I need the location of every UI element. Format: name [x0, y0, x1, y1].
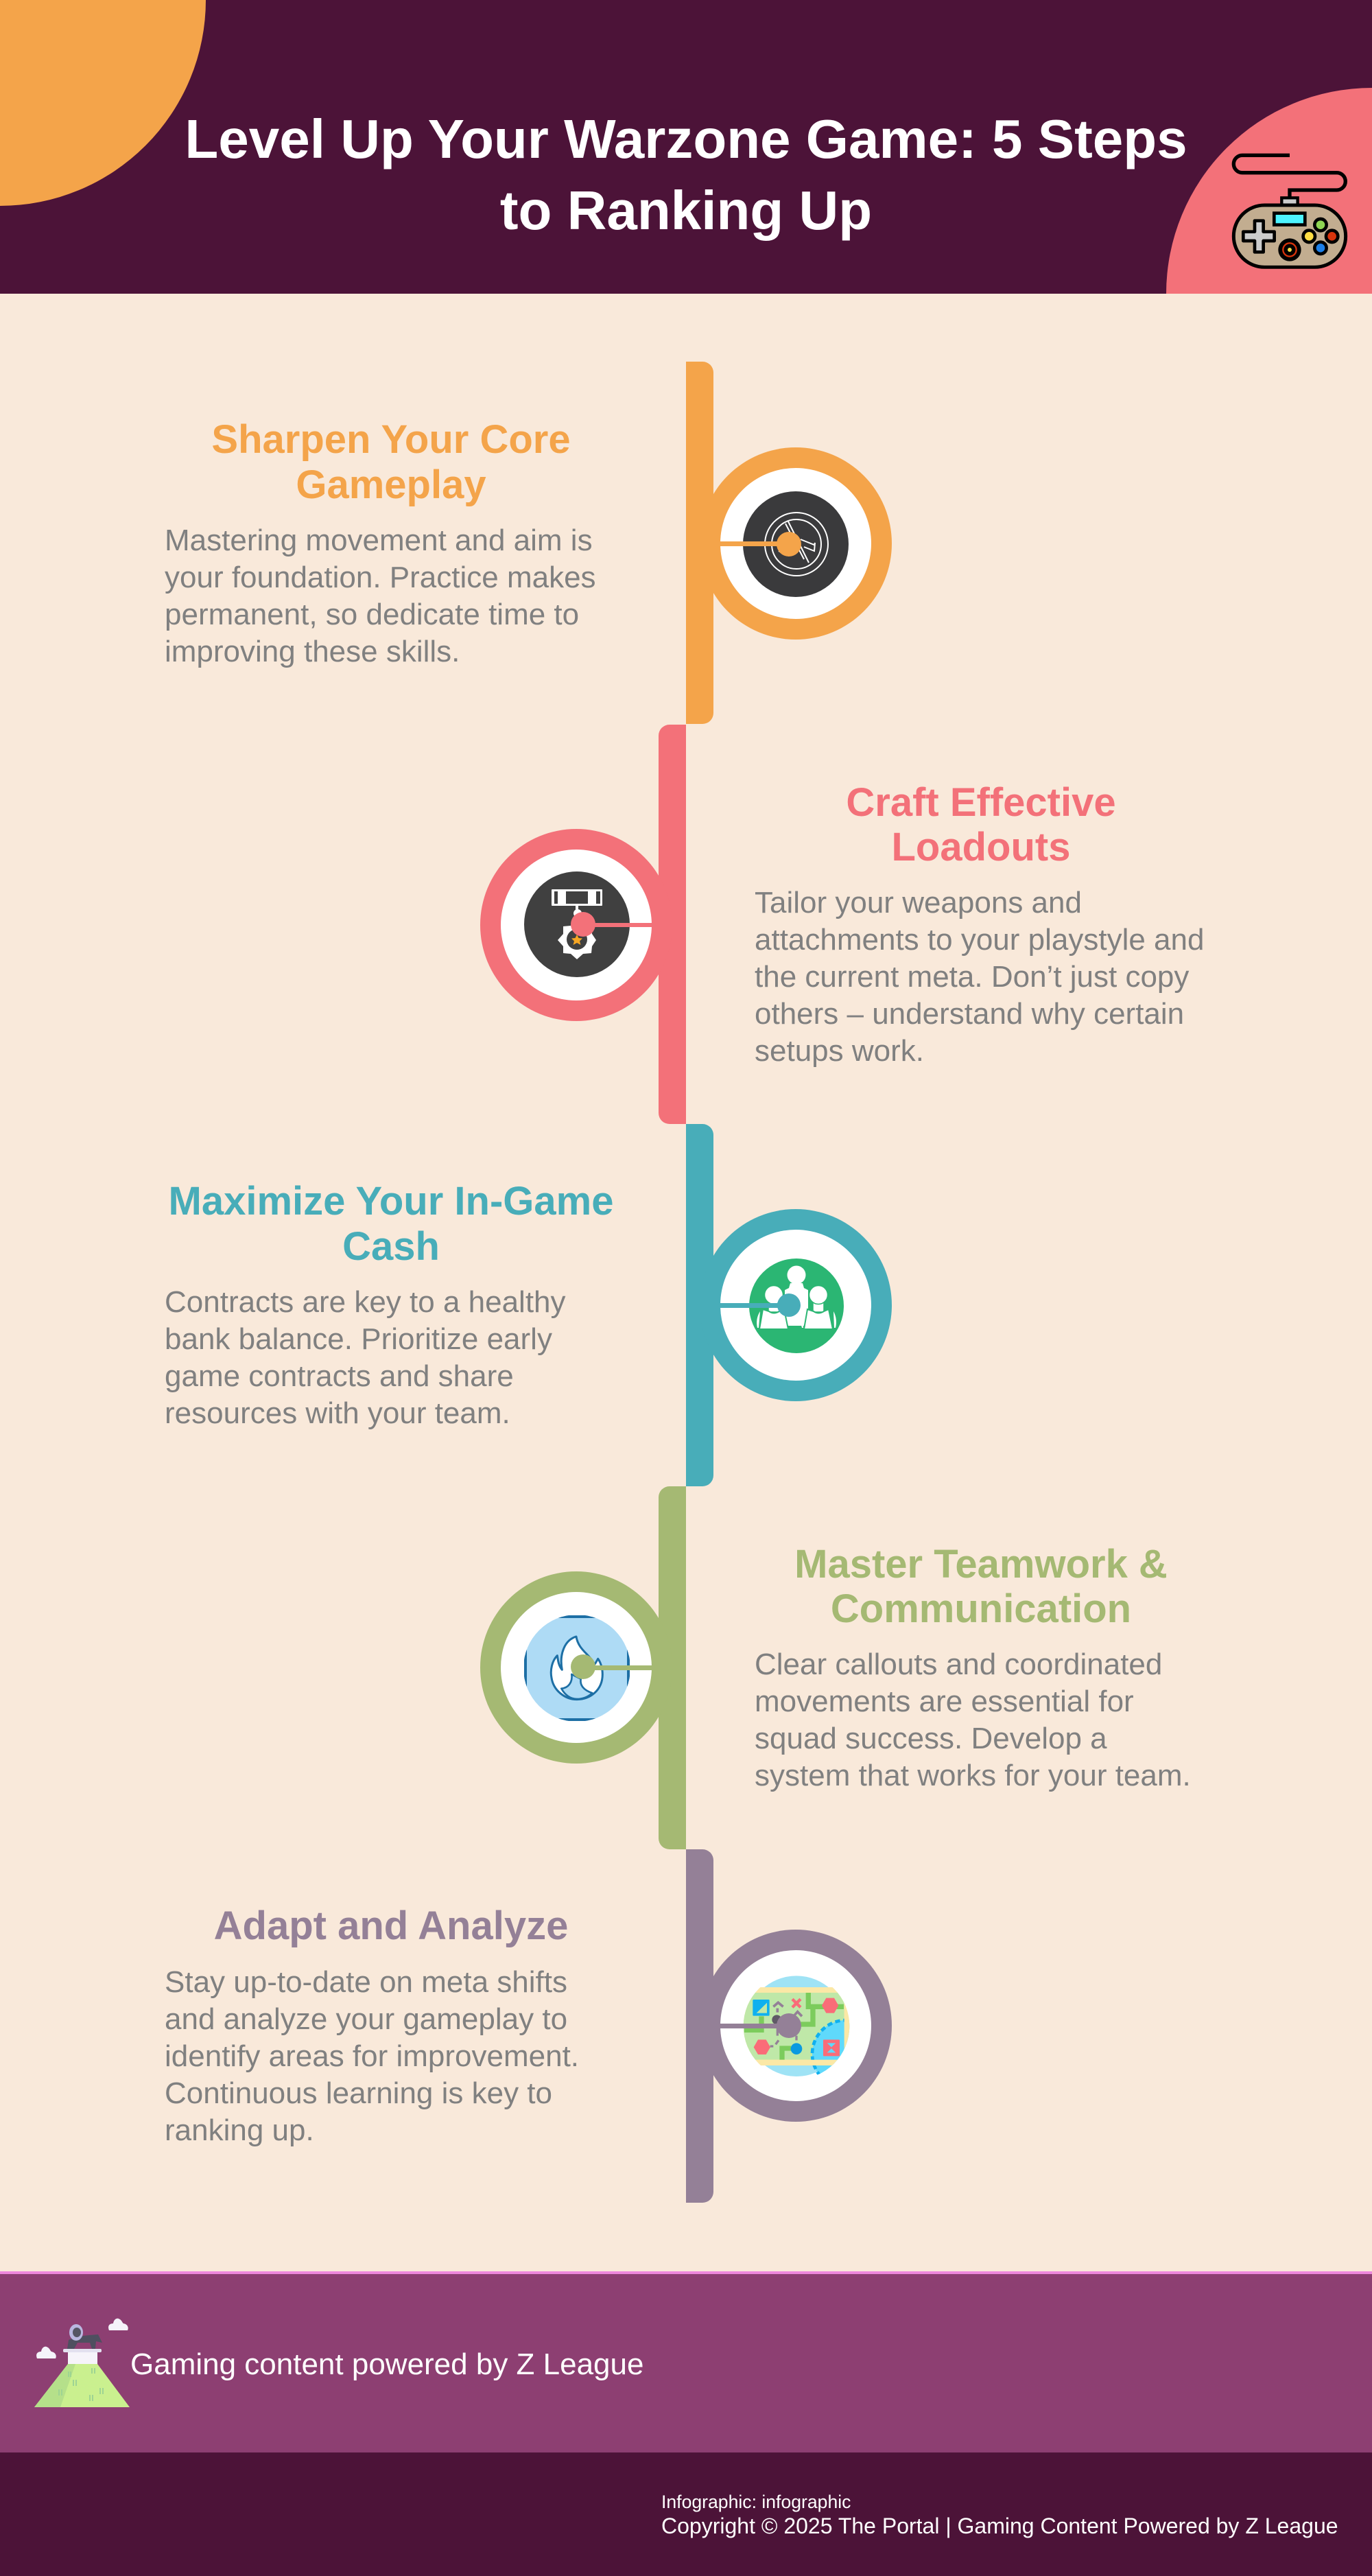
step 4 bar	[659, 1486, 686, 1849]
footer	[0, 2452, 1372, 2576]
step 1 heading: Sharpen Your Core	[211, 417, 571, 462]
step 1 heading	[211, 417, 571, 507]
step 1 heading: Gameplay	[296, 462, 486, 507]
icon: team	[749, 1258, 844, 1353]
step 2 connector	[571, 912, 652, 937]
decorative orange circle	[0, 0, 206, 206]
step 5 panel	[165, 1849, 892, 2203]
step 3 text: bank balance. Prioritize early	[165, 1322, 552, 1356]
step 1 panel	[165, 362, 892, 724]
step 3 heading: Cash	[342, 1224, 440, 1269]
step 3 text: game contracts and share	[165, 1359, 514, 1393]
step 2 heading	[846, 780, 1116, 869]
step 4 text: squad success. Develop a	[755, 1722, 1107, 1755]
step 2 text: attachments to your playstyle and	[755, 923, 1204, 957]
step 1 bar	[686, 362, 713, 724]
step 5 text: ranking up.	[165, 2114, 314, 2147]
step 1 text: Mastering movement and aim is	[165, 524, 593, 557]
step 2 heading: Loadouts	[892, 825, 1070, 869]
step 5 ring	[700, 1930, 892, 2122]
step 2 heading: Craft Effective	[846, 780, 1116, 825]
step 3 bar	[686, 1124, 713, 1486]
sponsor text: Gaming content powered by Z League	[130, 2347, 643, 2381]
step 4 text	[755, 1648, 1191, 1792]
step 5 bar	[686, 1849, 713, 2203]
step 5 heading: Adapt and Analyze	[214, 1904, 568, 1948]
step 4 text: Clear callouts and coordinated	[755, 1648, 1162, 1681]
step 1 ring	[700, 447, 892, 640]
icon: flame	[525, 1617, 628, 1720]
icon: target weapon	[743, 491, 849, 597]
step 4 text: system that works for your team.	[755, 1759, 1191, 1792]
step 3 heading	[169, 1179, 613, 1269]
step 1 text: improving these skills.	[165, 635, 460, 668]
step 2 text: setups work.	[755, 1034, 924, 1068]
step 3 panel	[165, 1124, 892, 1486]
step 3 heading: Maximize Your In-Game	[169, 1179, 613, 1223]
step 5 connector	[720, 2013, 801, 2038]
step 2 text: the current meta. Don’t just copy	[755, 960, 1189, 994]
step 5 text: Continuous learning is key to	[165, 2076, 552, 2110]
header band	[0, 0, 1372, 294]
step 4 text: movements are essential for	[755, 1685, 1134, 1718]
step 3 text: resources with your team.	[165, 1396, 510, 1430]
icon: flask	[34, 2319, 130, 2407]
step 1 text: your foundation. Practice makes	[165, 561, 596, 594]
title	[185, 108, 1187, 241]
step 2 bar	[659, 725, 686, 1124]
step 5 text: and analyze your gameplay to	[165, 2002, 567, 2036]
footer text	[661, 2492, 1338, 2538]
step 4 ring	[480, 1571, 672, 1764]
step 2 ring	[480, 829, 672, 1021]
step 3 connector	[720, 1293, 801, 1317]
step 4 heading: Master Teamwork &	[794, 1542, 1168, 1586]
decorative pink circle	[1166, 88, 1372, 294]
icon: game controller	[1233, 155, 1346, 267]
title: Level Up Your Warzone Game: 5 Steps	[185, 108, 1187, 169]
footer text: Copyright © 2025 The Portal | Gaming Content Powered by Z League	[661, 2514, 1338, 2538]
step 4 heading: Communication	[831, 1586, 1131, 1631]
step 2 panel	[480, 725, 1204, 1124]
sponsor band	[0, 2271, 1372, 2452]
step 5 text	[165, 1965, 579, 2147]
icon: medal	[524, 871, 630, 977]
step 2 text	[755, 886, 1204, 1068]
step 5 text: Stay up-to-date on meta shifts	[165, 1965, 567, 1999]
step 1 text: permanent, so dedicate time to	[165, 598, 579, 631]
icon: map	[744, 1976, 849, 2076]
step 3 text	[165, 1285, 566, 1430]
step 3 ring	[700, 1209, 892, 1401]
step 3 text: Contracts are key to a healthy	[165, 1285, 566, 1319]
step 1 connector	[720, 532, 801, 557]
footer text: Infographic: infographic	[661, 2492, 851, 2512]
step 2 text: Tailor your weapons and	[755, 886, 1082, 920]
title: to Ranking Up	[500, 180, 872, 241]
step 4 connector	[571, 1654, 652, 1679]
step 4 panel	[480, 1486, 1191, 1849]
step 2 text: others – understand why certain	[755, 997, 1184, 1031]
step 1 text	[165, 524, 596, 668]
step 5 text: identify areas for improvement.	[165, 2039, 579, 2073]
step 4 heading	[794, 1542, 1168, 1631]
